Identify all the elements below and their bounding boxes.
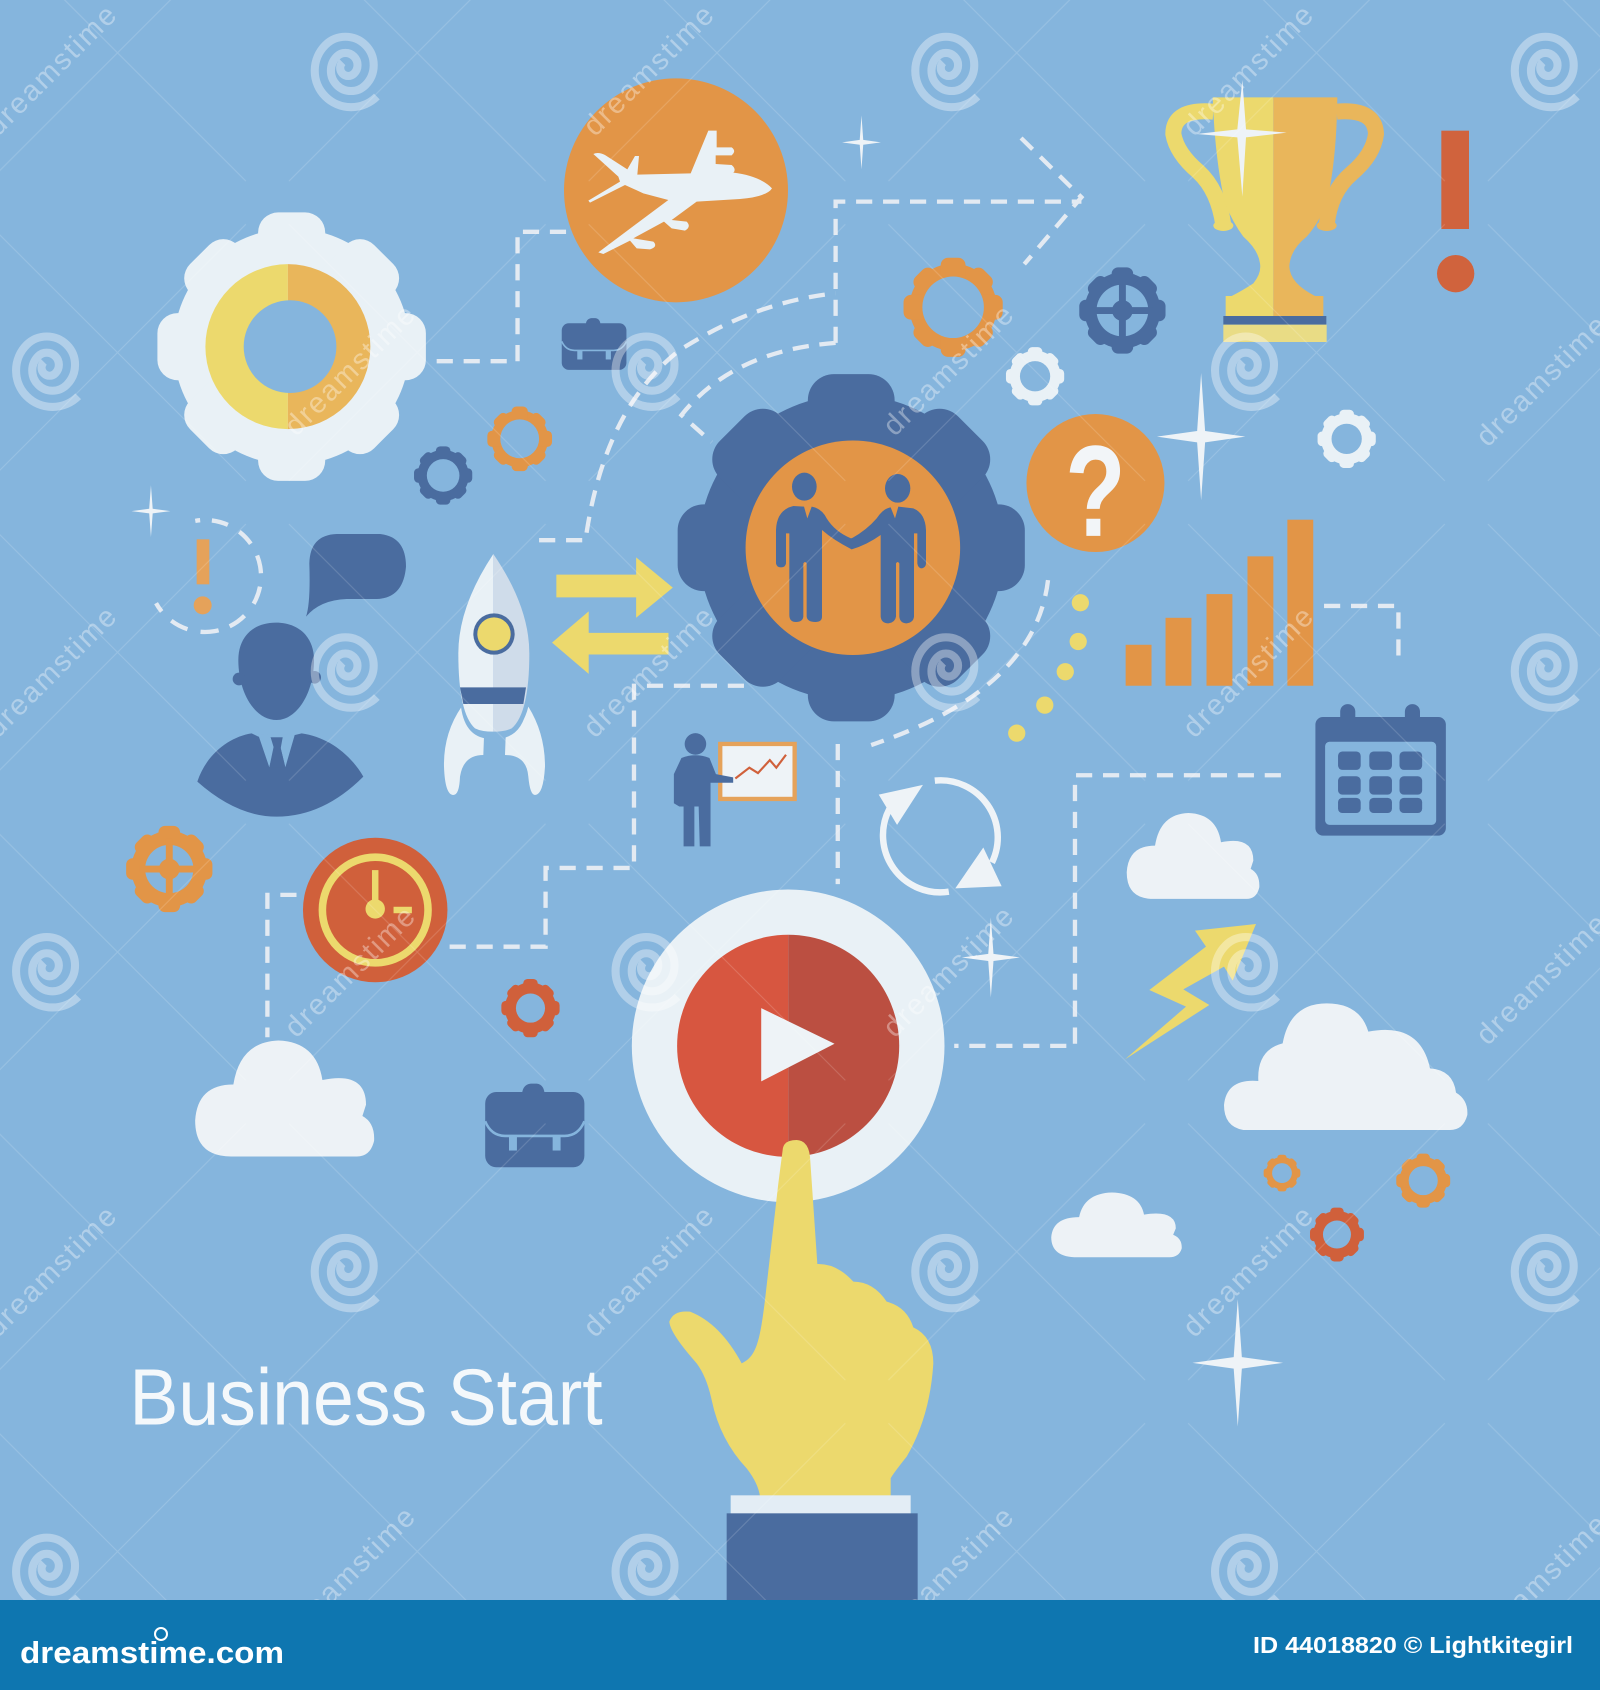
orange gear small bbox=[487, 406, 552, 471]
businessman bbox=[197, 623, 363, 817]
orange gear lower right bbox=[1396, 1154, 1450, 1208]
pointing hand with sleeve bbox=[669, 1140, 933, 1600]
icon: refresh arrows bbox=[879, 780, 1002, 892]
central orange disc bbox=[746, 440, 960, 655]
icon: exchange arrows bbox=[552, 557, 673, 674]
watermark overlay: dreamstime bbox=[577, 0, 720, 142]
watermark overlay: dreamstime bbox=[577, 1200, 720, 1344]
handshake figures bbox=[776, 473, 926, 623]
watermark overlay: dreamstime bbox=[279, 901, 422, 1044]
footer image id: ID 44018820 © Lightkitegirl bbox=[1253, 1632, 1573, 1658]
rocket bbox=[444, 554, 545, 795]
watermark overlay: dreamstime bbox=[877, 901, 1020, 1044]
central blue gear bbox=[678, 374, 1025, 721]
blue gear with cross bbox=[1079, 267, 1166, 354]
yellow dots bbox=[1008, 594, 1089, 742]
watermark overlay: dreamstime bbox=[279, 299, 422, 442]
speech bubble bbox=[306, 534, 406, 617]
red gear lower right bbox=[1310, 1208, 1364, 1261]
cloud large right bbox=[1224, 1003, 1467, 1130]
dashed alert circle bbox=[140, 511, 270, 641]
white gear right bbox=[1318, 410, 1376, 468]
icon: presenter with chart board bbox=[674, 733, 797, 846]
trophy bbox=[1173, 80, 1376, 342]
title: Business Start bbox=[129, 1352, 603, 1441]
orange gear lower right small bbox=[1264, 1155, 1300, 1191]
icon: lightning bolt bbox=[1125, 924, 1256, 1059]
icon: calendar bbox=[1315, 704, 1446, 836]
bar chart bbox=[1126, 520, 1313, 686]
watermark overlay: dreamstime bbox=[1177, 601, 1320, 744]
airplane badge bbox=[564, 78, 788, 302]
watermark overlay: dreamstime bbox=[877, 1501, 1020, 1644]
cloud small bbox=[1051, 1192, 1182, 1257]
orange gear with cross bbox=[126, 826, 212, 912]
watermark overlay: dreamstime bbox=[1177, 1200, 1320, 1344]
watermark overlay: dreamstime bbox=[279, 1501, 422, 1644]
watermark overlay: dreamstime bbox=[877, 299, 1020, 442]
white gear bbox=[1006, 347, 1064, 405]
orange gear top bbox=[904, 258, 1003, 357]
question mark badge bbox=[1026, 414, 1164, 564]
white gear with donut bbox=[157, 212, 426, 481]
footer bar bbox=[0, 1600, 1600, 1690]
cloud left bbox=[195, 1040, 374, 1156]
footer logo text: dreamstime.com bbox=[20, 1635, 284, 1670]
red gear bbox=[501, 979, 560, 1037]
watermark overlay: dreamstime bbox=[577, 601, 720, 744]
blue gear small bbox=[414, 446, 472, 505]
four-point stars bbox=[132, 115, 1283, 1426]
icon: large briefcase bbox=[485, 1084, 584, 1167]
red exclamation mark bbox=[1437, 131, 1474, 292]
dashed connector lines bbox=[267, 138, 1398, 1046]
question mark badge: ? bbox=[1065, 419, 1126, 564]
icon: clock badge bbox=[303, 838, 447, 982]
cloud upper right bbox=[1127, 813, 1259, 899]
person with speech bubble, rocket and alert bbox=[140, 511, 545, 817]
icon: small briefcase bbox=[562, 318, 626, 370]
watermark overlay: dreamstime bbox=[1177, 0, 1320, 142]
play button bbox=[632, 890, 945, 1202]
